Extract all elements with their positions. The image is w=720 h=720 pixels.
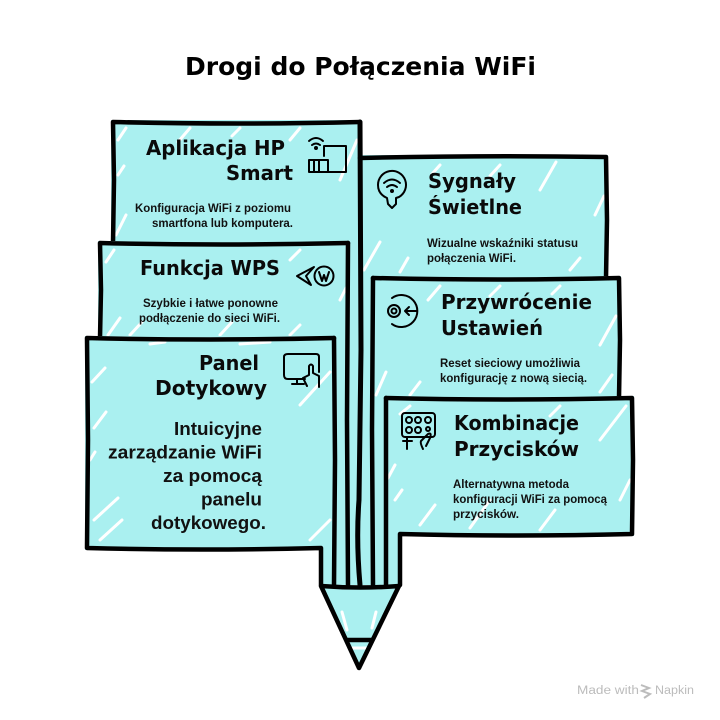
icon: reset arrow bbox=[388, 295, 417, 327]
text: Sygnały Świetlne description: Wizualne wskaźniki statusu bbox=[427, 238, 578, 250]
panel: Sygnały Świetlne bbox=[360, 155, 608, 585]
text: Panel Dotykowy description: panelu bbox=[201, 490, 262, 510]
heading: Sygnały Świetlne bbox=[428, 169, 522, 219]
panel: Przywrócenie Ustawień bbox=[372, 276, 621, 585]
panel: Funkcja WPS bbox=[98, 241, 350, 585]
text: Aplikacja HP Smart description: Konfiguracja WiFi z poziomu bbox=[135, 203, 291, 215]
pencil tip bbox=[321, 586, 400, 668]
text: Aplikacja HP Smart description bbox=[135, 203, 293, 230]
icon: touch screen bbox=[284, 354, 319, 387]
text: Panel Dotykowy description: zarządzanie WiFi bbox=[108, 442, 262, 462]
heading: Sygnały Świetlne: Świetlne bbox=[428, 195, 522, 219]
text: Kombinacje Przycisków description: przycisków. bbox=[453, 509, 519, 521]
heading: Panel Dotykowy: Dotykowy bbox=[155, 376, 267, 400]
text: Przywrócenie Ustawień description: Reset sieciowy umożliwia bbox=[440, 358, 581, 370]
heading: Panel Dotykowy bbox=[155, 351, 267, 400]
watermark: Made with bbox=[577, 685, 639, 697]
text: Aplikacja HP Smart description: smartfona lub komputera. bbox=[152, 218, 293, 230]
text: Funkcja WPS description: Szybkie i łatwe ponowne bbox=[143, 298, 278, 310]
text: Sygnały Świetlne description: połączenia WiFi. bbox=[427, 253, 516, 265]
text: Przywrócenie Ustawień description bbox=[440, 358, 587, 385]
panel: Kombinacje Przycisków bbox=[386, 396, 634, 585]
text: Sygnały Świetlne description bbox=[427, 238, 578, 265]
heading: Sygnały Świetlne: Sygnały bbox=[428, 169, 516, 193]
watermark: Napkin bbox=[655, 685, 694, 697]
heading: Aplikacja HP Smart bbox=[146, 136, 293, 185]
text: Funkcja WPS description bbox=[139, 298, 280, 325]
text: Kombinacje Przycisków description: konfiguracji WiFi za pomocą bbox=[453, 494, 608, 506]
panel: Aplikacja HP Smart bbox=[111, 120, 362, 585]
text: Przywrócenie Ustawień description: konfigurację z nową siecią. bbox=[440, 373, 587, 385]
heading: Aplikacja HP Smart: Smart bbox=[226, 161, 293, 185]
title: Drogi do Połączenia WiFi bbox=[185, 52, 536, 81]
heading: Panel Dotykowy: Panel bbox=[199, 351, 259, 375]
icon: button keypad bbox=[402, 413, 435, 449]
text: Kombinacje Przycisków description: Alternatywna metoda bbox=[453, 479, 570, 491]
icon: light bulb with wifi bbox=[378, 171, 406, 208]
text: Panel Dotykowy description: dotykowego. bbox=[151, 513, 266, 533]
heading: Kombinacje Przycisków: Przycisków bbox=[454, 437, 579, 461]
heading: Przywrócenie Ustawień: Ustawień bbox=[441, 316, 543, 340]
text: Panel Dotykowy description: za pomocą bbox=[163, 466, 263, 486]
text: Panel Dotykowy description bbox=[108, 419, 266, 533]
text: Panel Dotykowy description: Intuicyjne bbox=[174, 419, 262, 439]
text: Kombinacje Przycisków description bbox=[453, 479, 608, 521]
text: Funkcja WPS description: podłączenie do sieci WiFi. bbox=[139, 313, 280, 325]
heading: Funkcja WPS: Funkcja WPS bbox=[140, 256, 280, 280]
icon: wifi with devices bbox=[309, 138, 346, 172]
panel: Panel Dotykowy bbox=[85, 336, 336, 585]
heading: Kombinacje Przycisków: Kombinacje bbox=[454, 411, 579, 435]
watermark bbox=[577, 685, 694, 698]
heading: Przywrócenie Ustawień bbox=[441, 290, 592, 340]
icon: WPS arrow and circle bbox=[297, 266, 334, 286]
heading: Przywrócenie Ustawień: Przywrócenie bbox=[441, 290, 592, 314]
heading: Kombinacje Przycisków bbox=[454, 411, 579, 461]
heading: Aplikacja HP Smart: Aplikacja HP bbox=[146, 136, 285, 160]
pencil body lines bbox=[334, 122, 386, 585]
